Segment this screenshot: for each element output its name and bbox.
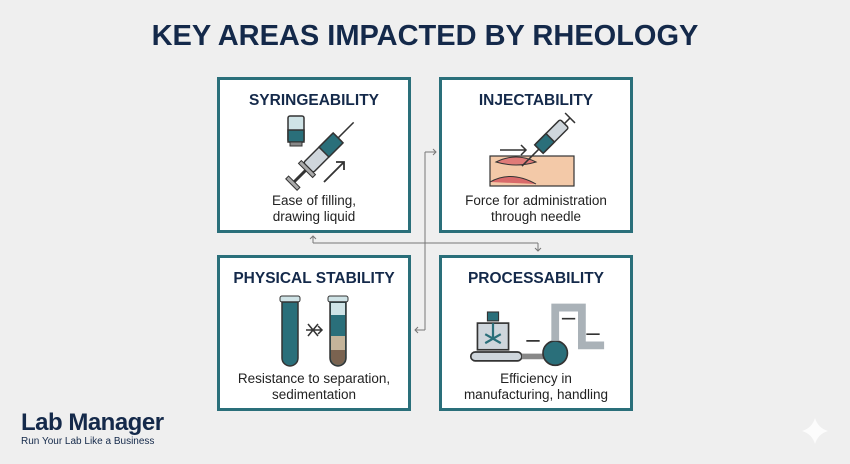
panel: processability: manufacturing, handling xyxy=(464,387,608,402)
panel: processability xyxy=(439,255,633,411)
panel: processability: Efficiency in xyxy=(500,371,572,386)
panel: physical stability: PHYSICAL STABILITY xyxy=(233,270,395,287)
icon: sparkle xyxy=(802,418,828,444)
panel: syringeability: Ease of filling, xyxy=(272,193,356,208)
icon: syringe and vial xyxy=(285,115,354,191)
panel: injectability: through needle xyxy=(491,209,581,224)
panel: injectability: INJECTABILITY xyxy=(479,92,593,109)
panel: syringeability: drawing liquid xyxy=(273,209,355,224)
icon: manufacturing line xyxy=(470,304,604,366)
icon: test tubes xyxy=(280,296,348,367)
panel: physical stability: Resistance to separation, xyxy=(238,371,390,386)
panel: syringeability xyxy=(217,77,411,233)
panel: syringeability: SYRINGEABILITY xyxy=(249,92,379,109)
icon: needle into skin xyxy=(489,112,576,187)
panel: physical stability: sedimentation xyxy=(272,387,356,402)
title: KEY AREAS IMPACTED BY RHEOLOGY xyxy=(152,20,698,52)
logo: Run Your Lab Like a Business xyxy=(21,436,154,447)
panel: injectability: Force for administration xyxy=(465,193,607,208)
panel: physical stability xyxy=(217,255,411,411)
panel: injectability xyxy=(439,77,633,233)
panel: processability: PROCESSABILITY xyxy=(468,270,604,287)
logo: Lab Manager xyxy=(21,409,164,436)
